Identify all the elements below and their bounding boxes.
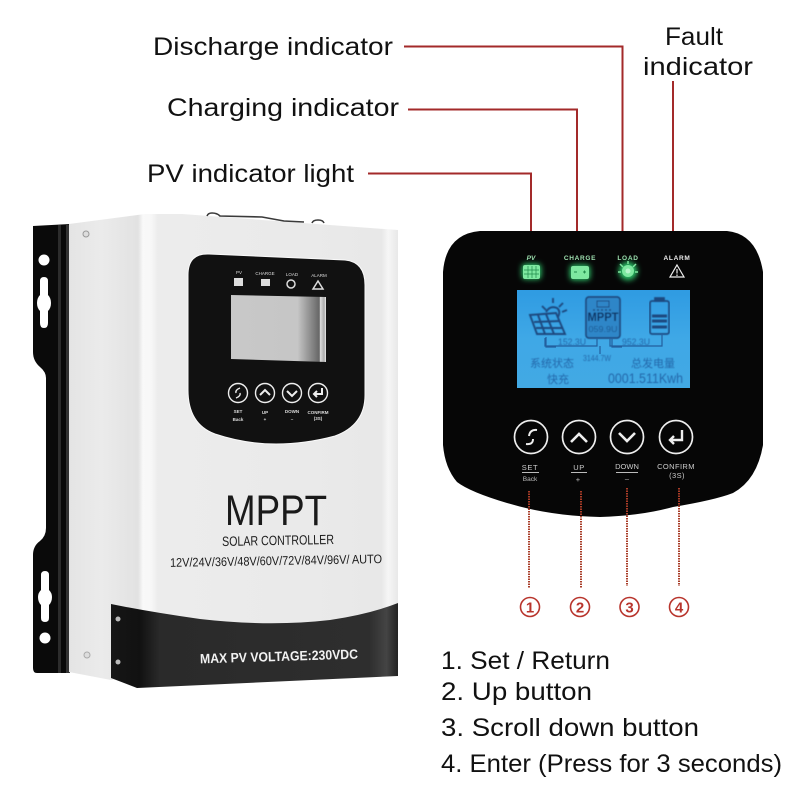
number callouts: 4 — [675, 600, 684, 616]
LCD readouts — [530, 337, 683, 386]
button: up — [562, 420, 596, 484]
dotted leader lines — [529, 488, 679, 588]
LCD wiring — [545, 334, 662, 354]
LCD readouts: 3144.7W — [583, 354, 611, 363]
button: up: + — [576, 475, 581, 484]
label: charging indicator — [167, 94, 577, 243]
device panel button labels: DOWN — [285, 409, 299, 414]
max PV voltage label: MAX PV VOLTAGE:230VDC — [200, 647, 358, 666]
button legend: 2. Up button — [441, 678, 592, 706]
device panel indicator labels: LOAD — [286, 272, 299, 277]
indicator: charge: CHARGE — [564, 255, 596, 262]
label: charging indicator: Charging indicator — [167, 94, 399, 122]
button legend: 4. Enter (Press for 3 seconds) — [441, 750, 782, 778]
device panel indicator labels: PV — [236, 270, 242, 275]
label: fault indicator: Fault — [665, 23, 723, 51]
button: set: SET — [522, 463, 538, 472]
black base band — [111, 603, 398, 688]
indicator: PV — [522, 255, 541, 279]
button: confirm: (3S) — [669, 471, 685, 480]
indicator: load: LOAD — [617, 255, 639, 262]
LCD readouts: 快充 — [547, 372, 569, 386]
button: confirm: CONFIRM — [657, 462, 695, 471]
indicator: load — [617, 255, 639, 280]
MPPT unit icon: MPPT — [588, 310, 619, 324]
button: down — [610, 420, 644, 483]
MPPT label: MPPT — [225, 487, 327, 535]
number callouts: 1 — [526, 600, 534, 616]
MPPT unit icon: 059.9U — [588, 325, 618, 334]
device control panel — [188, 254, 365, 444]
label: PV indicator light: PV indicator light — [147, 160, 354, 188]
product: MPPT solar controller — [33, 213, 398, 688]
button: down: – — [625, 474, 630, 483]
LCD readouts: 0001.511Kwh — [608, 370, 683, 386]
button: set — [514, 420, 548, 483]
label: fault indicator — [643, 23, 753, 237]
device panel indicator labels: CHARGE — [255, 271, 275, 276]
device panel button labels — [233, 409, 329, 422]
device panel indicator icons — [234, 278, 323, 289]
indicator: PV: PV — [527, 255, 536, 262]
indicator: alarm — [664, 255, 690, 277]
mounting bracket — [33, 224, 70, 673]
button: confirm — [657, 420, 695, 480]
label: fault indicator: indicator — [643, 53, 753, 81]
number callouts: 3 — [625, 600, 634, 616]
button legend: 1. Set / Return — [441, 647, 610, 675]
button: down: DOWN — [615, 462, 639, 471]
solar panel icon — [530, 298, 567, 334]
device panel button labels: + — [264, 417, 267, 422]
LCD readouts: 952.3U — [622, 337, 650, 347]
controller housing — [69, 214, 398, 680]
device panel button labels: UP — [262, 410, 268, 415]
device panel button labels: SET — [234, 409, 243, 414]
device panel button labels: (3S) — [314, 416, 323, 421]
number callouts — [520, 598, 688, 616]
device panel button labels: – — [291, 417, 294, 422]
label: discharge indicator: Discharge indicator — [153, 33, 393, 61]
MPPT unit icon — [586, 297, 620, 338]
housing top connectors — [207, 213, 324, 223]
device panel button labels: Back — [233, 417, 244, 422]
lower screw — [84, 652, 90, 658]
enlarged control panel — [443, 231, 763, 517]
button legend: 3. Scroll down button — [441, 714, 699, 742]
button: up: UP — [573, 463, 585, 472]
device panel indicator labels: ALARM — [311, 273, 327, 278]
LCD readouts: 系统状态 — [530, 356, 574, 370]
LCD readouts: 152.3U — [558, 337, 586, 347]
button: set: Back — [523, 476, 538, 483]
indicator: alarm: ALARM — [664, 255, 690, 262]
label: discharge indicator — [153, 33, 622, 235]
device panel indicator labels — [236, 270, 327, 278]
device panel buttons — [228, 384, 328, 402]
screw — [83, 231, 89, 237]
LCD readouts: 总发电量 — [631, 356, 675, 370]
voltage range label: 12V/24V/36V/48V/60V/72V/84V/96V/ AUTO — [170, 552, 382, 570]
battery icon — [650, 298, 669, 334]
LCD screen — [517, 290, 690, 388]
solar controller label: SOLAR CONTROLLER — [222, 532, 334, 549]
device panel button labels: CONFIRM — [308, 410, 329, 415]
number callouts: 2 — [576, 600, 584, 616]
label: PV indicator light — [147, 160, 531, 238]
indicator: charge — [564, 255, 596, 280]
device panel LCD — [231, 295, 326, 362]
button legend — [441, 647, 782, 778]
